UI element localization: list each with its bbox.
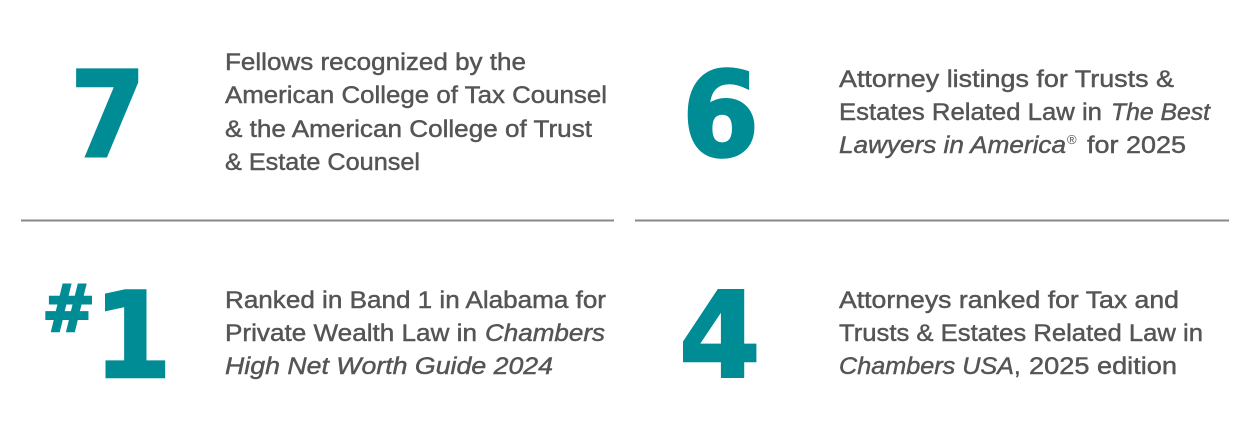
text: chambers usa description: , [1014, 353, 1021, 380]
panel: chambers high net worth [42, 268, 606, 406]
panel: chambers usa [679, 266, 1203, 405]
divider right [635, 220, 1229, 222]
number: 6: 6 [682, 48, 759, 185]
text: fellows description: American College of Tax Counsel [225, 82, 607, 109]
text: fellows description: & Estate Counsel [225, 149, 420, 176]
number: 4: 4 [679, 266, 761, 405]
text: listings description: Attorney listings for Trusts & [839, 66, 1174, 93]
text: chambers usa description: Chambers USA [839, 353, 1014, 380]
text: band 1 description: High Net Worth Guide 2024 [225, 353, 553, 380]
divider left [21, 220, 614, 222]
text: listings description [839, 66, 1211, 159]
number: 7: 7 [70, 45, 146, 184]
text: listings description: for 2025 [1087, 132, 1186, 159]
text: fellows description [225, 49, 607, 176]
text: fellows description: & the American College of Trust [225, 116, 592, 143]
number: #1 [42, 268, 172, 406]
panel: best lawyers listings [682, 48, 1211, 185]
number: #1: # [42, 271, 95, 347]
text: chambers usa description: Attorneys ranked for Tax and [839, 287, 1179, 314]
text: chambers usa description: Trusts & Estates Related Law in [839, 320, 1203, 347]
text: listings description: Lawyers in America [839, 132, 1066, 159]
text: listings description: Estates Related Law in [839, 99, 1102, 126]
number: #1: 1 [94, 268, 172, 406]
text: band 1 description: Private Wealth Law in [225, 320, 477, 347]
text: chambers usa description: 2025 edition [1029, 353, 1177, 380]
panel: fellows [70, 45, 607, 184]
text: listings description: The Best [1111, 99, 1211, 126]
text: band 1 description [225, 287, 606, 380]
text: chambers usa description [839, 287, 1203, 380]
text: band 1 description: Chambers [485, 320, 605, 347]
text: listings description: ® [1067, 132, 1077, 147]
text: fellows description: Fellows recognized by the [225, 49, 526, 76]
text: band 1 description: Ranked in Band 1 in Alabama for [225, 287, 606, 314]
